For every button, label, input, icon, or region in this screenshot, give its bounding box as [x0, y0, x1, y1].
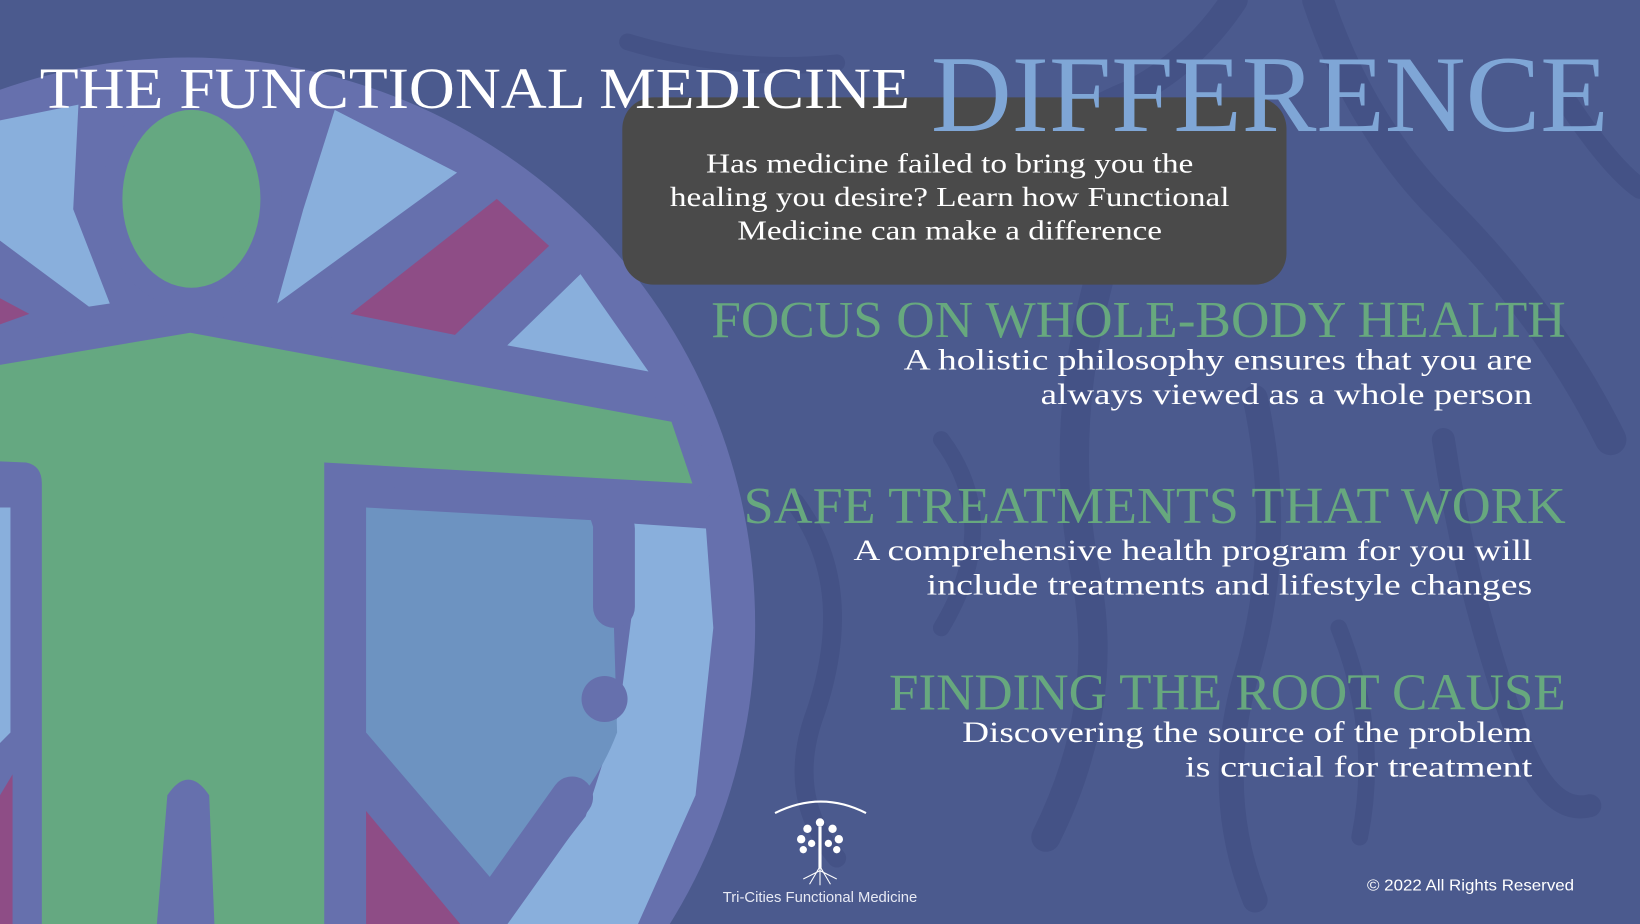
logo: Tri-Cities Functional Medicine [723, 890, 917, 906]
logo [723, 802, 917, 906]
title: DIFFERENCE: DIFFERENCE [931, 34, 1609, 155]
section: whole-body health [711, 291, 1566, 411]
intro box: Has medicine failed to bring you the [706, 149, 1193, 179]
section: safe treatments: A comprehensive health program for you will [853, 535, 1532, 567]
illustration: human figure in circle [0, 58, 755, 924]
section: whole-body health: FOCUS ON WHOLE-BODY HEALTH [711, 291, 1566, 349]
section: root cause [889, 663, 1566, 783]
body [0, 333, 692, 924]
section: root cause: FINDING THE ROOT CAUSE [889, 663, 1566, 721]
head [122, 110, 260, 288]
arm tip, dot, and stroke [594, 528, 634, 607]
copyright: © 2022 All Rights Reserved [1367, 878, 1574, 895]
intro box: Medicine can make a difference [737, 216, 1162, 246]
background: tree roots [628, 0, 1640, 900]
title: THE FUNCTIONAL MEDICINE [40, 56, 910, 121]
mid-blue region [366, 508, 617, 879]
section: root cause: is crucial for treatment [1185, 751, 1532, 783]
intro box: healing you desire? Learn how Functional [670, 182, 1230, 212]
section: whole-body health: always viewed as a whole person [1041, 379, 1533, 411]
intro box [622, 97, 1286, 285]
section: root cause: Discovering the source of the problem [962, 717, 1533, 749]
section: whole-body health: A holistic philosophy ensures that you are [904, 344, 1532, 376]
section: safe treatments: SAFE TREATMENTS THAT WORK [744, 477, 1566, 535]
section: safe treatments: include treatments and lifestyle changes [927, 569, 1532, 601]
section: safe treatments [744, 477, 1566, 601]
